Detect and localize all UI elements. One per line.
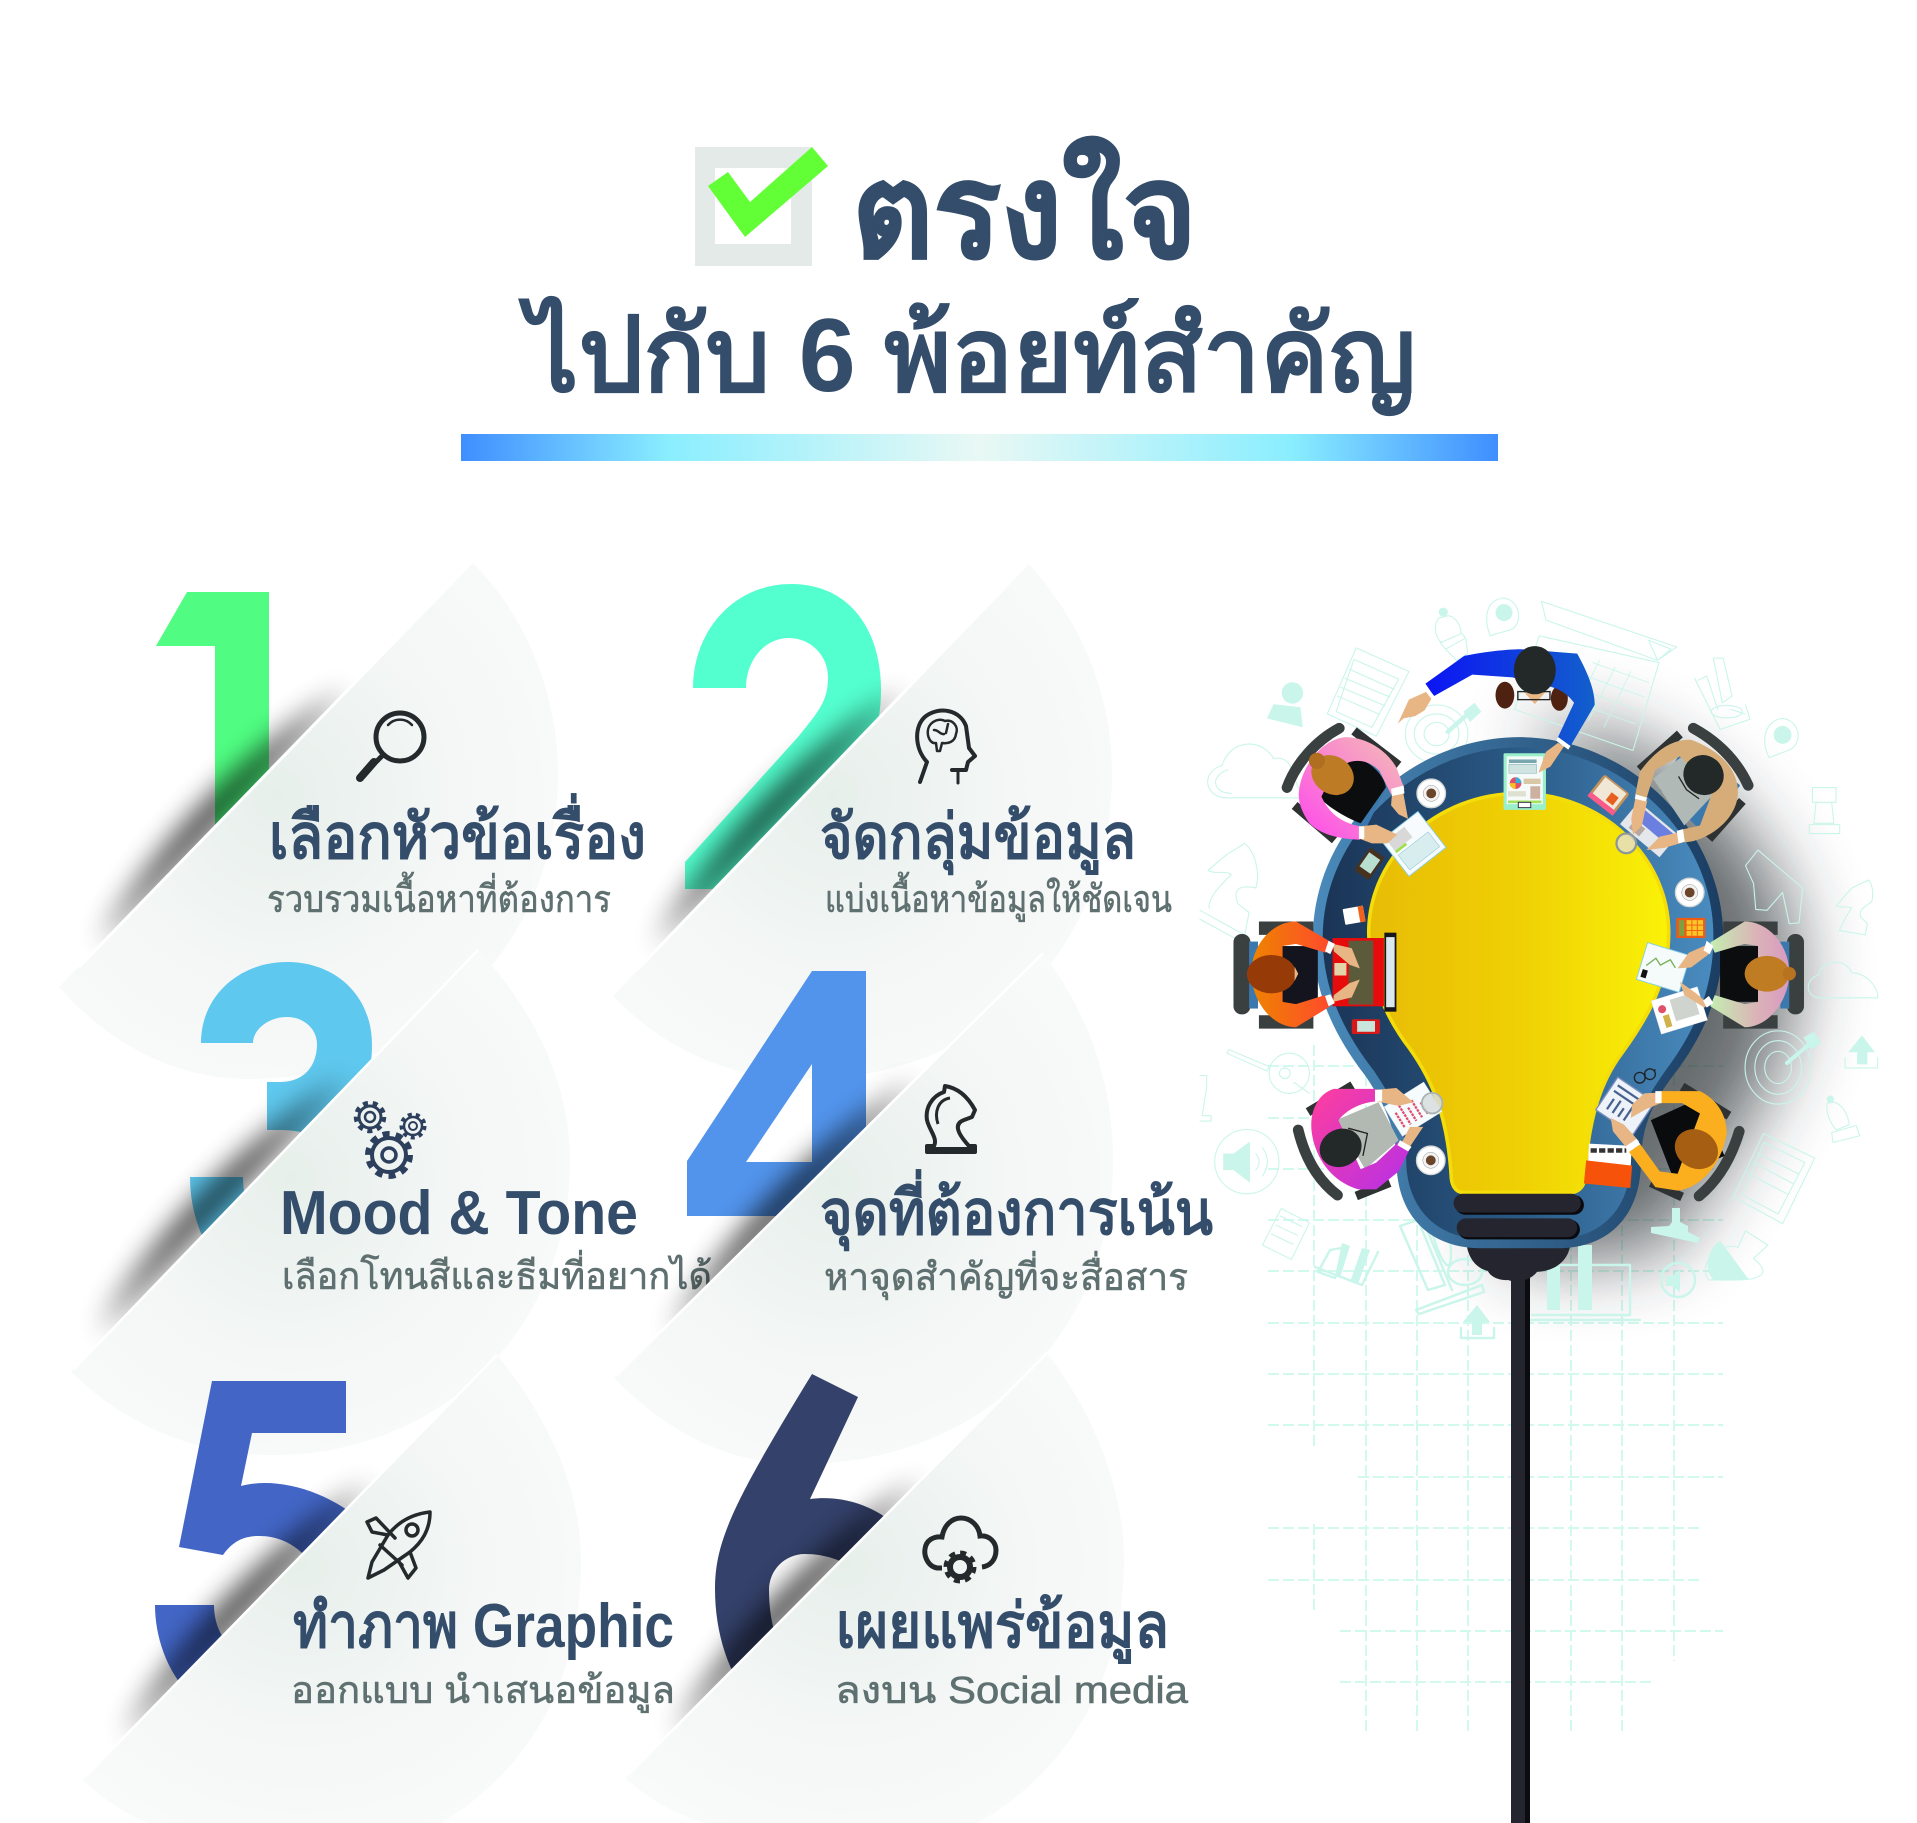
doodle: document right <box>1733 1134 1815 1224</box>
table shadow <box>1486 726 1794 1263</box>
shadow 5 <box>125 1483 372 1738</box>
doodle: user <box>1267 682 1303 727</box>
doodle: arrow below <box>1461 1305 1494 1338</box>
item: clipboard <box>1504 753 1546 810</box>
subtext 3: เลือกโทนสีและธีมที่อยากได้ <box>282 1250 712 1298</box>
person: lower right, yellow <box>1611 1087 1739 1197</box>
leaf 6 <box>625 1353 1124 1823</box>
doodle: lab equipment <box>1400 1220 1484 1314</box>
yellow bulb <box>1369 793 1669 1192</box>
doodle: books <box>1315 1243 1378 1285</box>
heading 4: จุดที่ต้องการเน้น <box>820 1169 1213 1251</box>
doodle: pawn right <box>1827 1096 1860 1142</box>
doodle: chart <box>1530 1245 1640 1320</box>
lightbulb table and people <box>1233 646 1804 1281</box>
document lower left <box>1384 1082 1442 1136</box>
shadow 6 <box>675 1481 922 1736</box>
bulb base cap <box>1467 1243 1571 1281</box>
doodle: pin right <box>1765 718 1798 758</box>
doodle: arrow up <box>1845 1035 1878 1068</box>
number 3 <box>190 962 400 1300</box>
number 1 <box>156 592 269 950</box>
item: red phone <box>1352 1019 1380 1034</box>
icon: cloud with gear <box>925 1518 996 1581</box>
doodle: lab <box>1695 658 1750 730</box>
leaf 4 <box>614 953 1113 1464</box>
doodle: flask <box>1705 1231 1768 1280</box>
icon: head with brain <box>917 711 975 783</box>
item: glasses <box>1634 1069 1655 1083</box>
subtext 4: หาจุดสำคัญที่จะสื่อสาร <box>824 1251 1188 1300</box>
doodle: document lower left <box>1262 1209 1309 1259</box>
number 4 <box>687 971 866 1300</box>
doodle: document <box>1327 648 1409 736</box>
person: right, green and pink <box>1678 921 1804 1029</box>
socket bars <box>1454 1194 1584 1239</box>
number 6 <box>715 1374 940 1740</box>
subtext 2: แบ่งเนื้อหาข้อมูลให้ชัดเจน <box>825 871 1172 922</box>
magnifier lower left <box>1422 1093 1442 1113</box>
shadow 3 <box>100 1078 347 1333</box>
doodle: pin top <box>1487 598 1519 636</box>
person: upper left, pink <box>1287 728 1408 843</box>
heading 5: ทำภาพ Graphic <box>293 1592 674 1661</box>
doodle: cloud right <box>1808 962 1878 998</box>
item: phone left <box>1354 847 1385 880</box>
shadow 2 <box>656 691 903 946</box>
doodle: pawn clip <box>1651 1208 1700 1243</box>
heading 3: Mood & Tone <box>280 1179 638 1248</box>
doodle: target top <box>1405 703 1481 763</box>
doodle: rook <box>1809 788 1840 834</box>
gradient underline <box>461 434 1498 461</box>
heading 6: เผยแพร่ข้อมูล <box>836 1592 1169 1664</box>
number 2 <box>685 584 881 889</box>
title: ไปกับ 6 พ้อยท์สำคัญ: ไปกับ 6 พ้อยท์สำคัญ <box>517 296 1416 417</box>
panel: item 3 <box>71 950 712 1455</box>
panel: item 2 <box>613 563 1172 1079</box>
item: calculator <box>1676 918 1705 938</box>
panel: item 5 <box>82 1355 675 1823</box>
doodles: lower line icons <box>1315 1208 1700 1338</box>
subtext 1: รวบรวมเนื้อหาที่ต้องการ <box>267 871 611 921</box>
doodle: speaker <box>1215 1130 1279 1194</box>
person: top, blue <box>1398 646 1595 773</box>
doodle: key <box>1227 1050 1309 1093</box>
items: coffee cups <box>1417 779 1704 1175</box>
icon: magnifier <box>360 713 424 778</box>
item: small card <box>1343 906 1366 925</box>
lightbulb stem <box>1511 1262 1530 1823</box>
checkbox icon <box>695 147 828 266</box>
shadow 1 <box>100 690 347 945</box>
document upper left <box>1381 811 1446 876</box>
leaf 3 <box>71 950 570 1455</box>
doodle: chess pawn top <box>1435 608 1468 660</box>
doodle: laptop <box>1515 601 1677 751</box>
grid: dashed background lines <box>1268 1045 1723 1732</box>
table: outer bulb <box>1313 737 1723 1248</box>
doodle: knight left <box>1200 843 1258 942</box>
doodle: knight right <box>1836 880 1873 935</box>
shadow 4 <box>671 1081 918 1336</box>
person: upper right, tan <box>1631 728 1748 850</box>
panel: item 1 <box>59 562 646 1079</box>
icon: gears <box>356 1103 424 1176</box>
document lower right <box>1596 1077 1655 1135</box>
item: orange folder <box>1584 1144 1632 1188</box>
documents right side <box>1636 943 1707 1034</box>
person: lower left, magenta <box>1298 1085 1423 1196</box>
leaf 5 <box>82 1355 581 1823</box>
table: inner bulb <box>1323 747 1713 1238</box>
laptop left <box>1333 933 1396 1012</box>
heading 2: จัดกลุ่มข้อมูล <box>820 803 1136 875</box>
panel: item 4 <box>614 953 1213 1464</box>
icon: rocket <box>367 1512 430 1578</box>
magnifier upper right <box>1616 834 1636 853</box>
doodle: cloud left <box>1208 744 1303 798</box>
title: ตรงใจ: ตรงใจ <box>852 136 1197 285</box>
subtext 5: ออกแบบ นำเสนอข้อมูล <box>291 1670 675 1713</box>
doodle: hand <box>1746 850 1803 924</box>
doodle: speaker small <box>1661 1263 1695 1297</box>
doodles: teal line icons around the table <box>1200 598 1878 1280</box>
person: left, orange <box>1233 921 1396 1029</box>
doodle: rook left <box>1200 1076 1211 1121</box>
icon: chess knight <box>927 1086 975 1153</box>
leaf 1 <box>59 562 558 1079</box>
leaf 2 <box>613 563 1112 1079</box>
subtext 6: ลงบน Social media <box>835 1670 1189 1712</box>
laptop upper right <box>1620 802 1678 857</box>
doodle: target right <box>1745 1031 1821 1104</box>
panel: item 6 <box>625 1353 1189 1823</box>
item: notebook <box>1587 774 1630 816</box>
number 5 <box>155 1381 400 1720</box>
heading 1: เลือกหัวข้อเรื่อง <box>269 793 646 872</box>
